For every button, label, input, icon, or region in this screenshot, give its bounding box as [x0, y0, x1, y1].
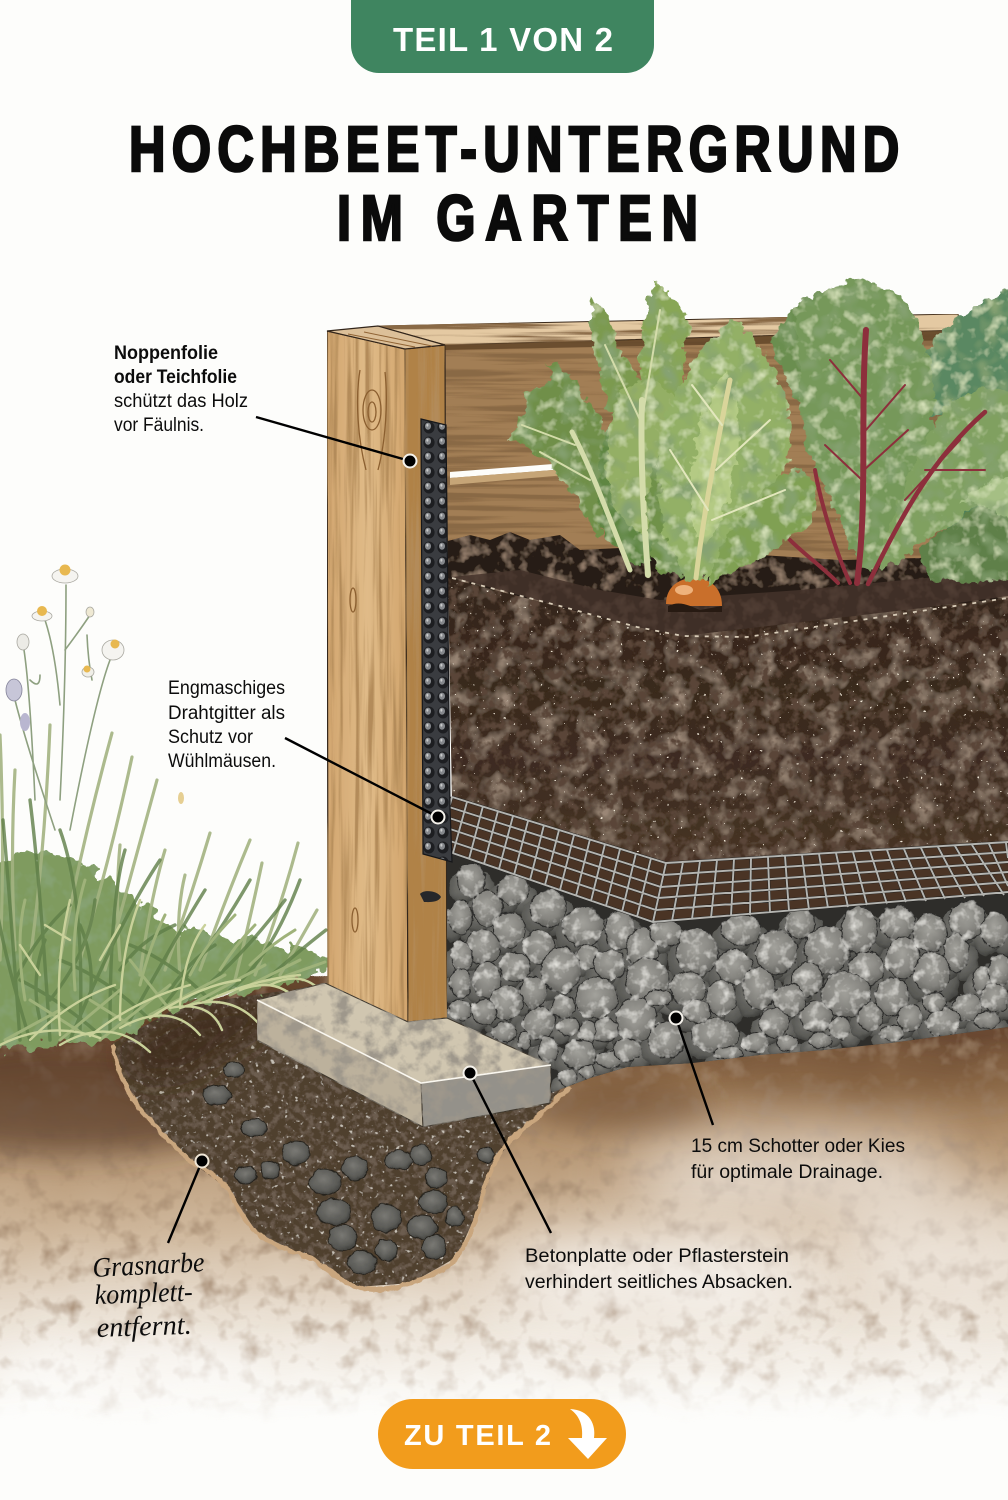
icon: curved arrow	[568, 1409, 607, 1459]
badge: part 1 of 2	[351, 0, 654, 73]
wood knots	[350, 370, 386, 932]
label: wire mesh: Drahtgitter als	[168, 703, 285, 724]
label: slab: Betonplatte oder Pflasterstein	[525, 1246, 789, 1267]
callout line: wire mesh	[285, 738, 444, 824]
label: wire mesh: Engmaschiges	[168, 678, 285, 699]
label: gravel: für optimale Drainage.	[691, 1162, 883, 1183]
title: HOCHBEET-UNTERGRUND	[129, 114, 899, 185]
wire mesh	[438, 797, 1008, 922]
trench pebbles	[203, 1062, 494, 1274]
badge: part 1 of 2: TEIL 1 VON 2	[393, 21, 613, 58]
trench with removed turf	[112, 984, 570, 1290]
callout line: slab	[464, 1066, 551, 1233]
title: IM GARTEN	[337, 183, 698, 254]
label: slab: verhindert seitliches Absacken.	[525, 1272, 793, 1293]
concrete slab	[257, 983, 551, 1127]
label: membrane: schützt das Holz	[114, 391, 248, 412]
callout line: gravel	[670, 1012, 713, 1125]
dimpled membrane	[421, 419, 452, 862]
wildflower heads	[6, 564, 184, 804]
plant: lettuce right	[648, 320, 818, 584]
gravel drainage layer	[440, 850, 1008, 1096]
button: to part 2	[378, 1399, 626, 1469]
callout line: turf	[168, 1154, 208, 1243]
button: to part 2: ZU TEIL 2	[404, 1420, 551, 1452]
label: turf removed: komplett-	[94, 1277, 193, 1311]
label: wire mesh: Wühlmäusen.	[168, 751, 276, 772]
label: membrane: oder Teichfolie	[114, 367, 237, 388]
grass clump with wildflowers	[0, 564, 326, 1052]
wooden corner post	[327, 326, 447, 1022]
wildflower stems	[15, 585, 110, 830]
back wall wooden planks	[378, 314, 1008, 610]
label: gravel	[691, 1136, 905, 1183]
label: turf removed	[92, 1247, 205, 1344]
plant: red chard	[770, 280, 1008, 584]
plant: back dark leaf	[925, 285, 1008, 570]
label: membrane: Noppenfolie	[114, 343, 218, 364]
plant: frilly lettuce left	[510, 278, 690, 575]
ground soil wash	[0, 970, 1008, 1430]
carrot	[666, 578, 722, 612]
label: slab	[525, 1246, 793, 1293]
label: turf removed: Grasnarbe	[92, 1247, 205, 1284]
raised bed soil	[448, 532, 1008, 866]
label: membrane: vor Fäulnis.	[114, 415, 204, 436]
label: turf removed: entfernt.	[96, 1310, 192, 1344]
label: membrane	[114, 343, 248, 436]
label: wire mesh	[168, 678, 285, 772]
label: wire mesh: Schutz vor	[168, 727, 254, 748]
title	[129, 114, 899, 254]
label: gravel: 15 cm Schotter oder Kies	[691, 1136, 905, 1157]
callout line: membrane	[256, 417, 416, 468]
